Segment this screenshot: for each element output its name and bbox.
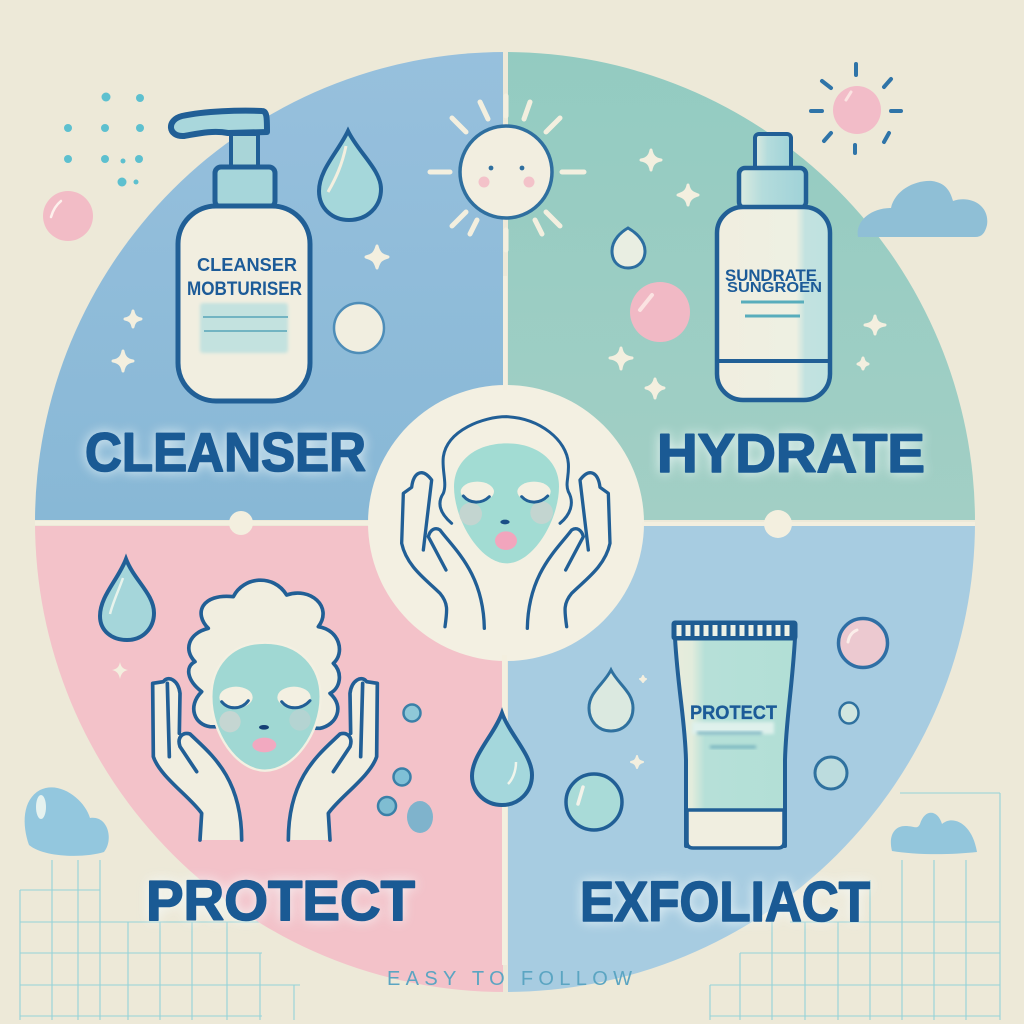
icon: sunscreen bottle [717,134,830,400]
icon: large water drop centre [472,713,532,805]
icon: bubble cloud bottom left [25,787,109,856]
divider: vertical axis lower [502,655,507,965]
node: right connector dot [764,510,792,538]
bottle label text second line: MOBTURISER [187,279,302,300]
icon: pink bubble hydrate [630,282,690,342]
illustration: centre face and hands [402,417,610,628]
icon: water drop left [100,559,154,640]
decoration: droplet dots top left [64,92,144,186]
node: left connector dot [229,511,253,535]
divider: horizontal axis right [642,522,975,526]
sparkles: exfoliate quadrant [631,676,646,768]
left hand [153,679,242,840]
bottle label text: CLEANSER [197,255,297,275]
icon: cloud bottom right [891,813,977,854]
icon: smiling sun [430,96,584,250]
centre circle [368,385,644,661]
sunscreen label text: SUNDRATE [725,266,817,285]
footer caption: EASY TO FOLLOW [387,968,632,990]
panel: cleanser quadrant [30,50,503,520]
heading: protect: PROTECT [146,869,415,933]
panel: exfoliate quadrant [508,526,978,996]
icon: water drop top [319,131,381,220]
icon: small drop hydrate [612,228,645,268]
heading: hydrate: HYDRATE [657,422,925,484]
icon: pink sun top right [811,64,901,153]
icon: cream bubble [334,303,384,353]
panel: protect quadrant [30,526,503,996]
sparkle: protect quadrant [112,662,128,679]
icon: tiny droplets protect [378,704,433,833]
icon: cloud top right [858,181,987,237]
icon: bubbles exfoliate [566,618,888,830]
heading: exfoliact: EXFOLIACT [580,870,870,934]
right hand [527,473,610,628]
icon: pink bubble left [43,191,93,241]
panel: hydrate quadrant [508,50,978,520]
divider: horizontal axis left [35,521,370,525]
illustration: protect face with foam and hands [153,580,377,840]
sparkles: cleanser quadrant [113,246,388,371]
sparkles: hydrate quadrant [610,150,885,398]
heading: cleanser: CLEANSER [85,421,366,483]
sunscreen label text second line: SUNGROEN [727,279,822,296]
tube label text: PROTECT [690,703,777,724]
left hand [402,473,484,628]
right hand [288,679,377,840]
icon: cleanser pump bottle [171,111,310,401]
icon: protect cream tube [673,622,796,848]
divider: sun to centre [503,276,507,390]
